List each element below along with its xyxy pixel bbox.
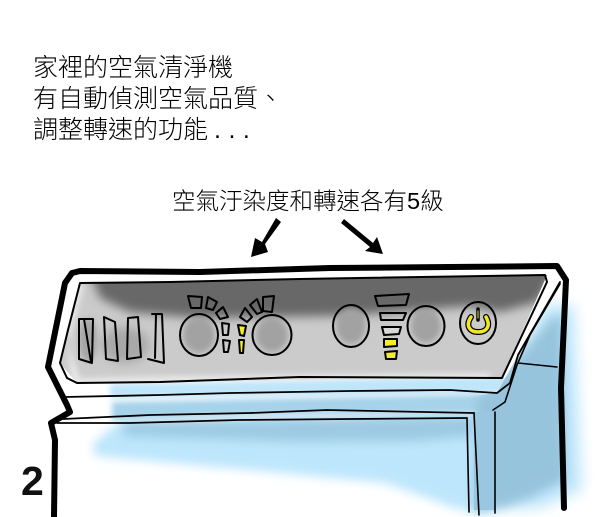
icon: power button [460, 302, 496, 344]
heading text: 有自動偵測空氣品質、 [33, 85, 283, 113]
heading text: 調整轉速的功能... [33, 116, 257, 144]
blue shading [92, 305, 582, 515]
arrow: right [341, 219, 383, 254]
outer outline [48, 266, 566, 517]
heading text [33, 54, 283, 144]
illustration: air purifier control panel [45, 218, 589, 517]
panel face shading [61, 275, 547, 382]
panel number: 2 [21, 458, 44, 504]
arrow: left [251, 218, 281, 257]
right dials and fan speed indicators [333, 294, 444, 359]
vents [79, 314, 164, 363]
caption: five levels: 空氣汙染度和轉速各有5級 [172, 188, 444, 214]
heading text: 家裡的空氣清淨機 [33, 54, 233, 82]
left dial and pollution level indicators [180, 296, 292, 356]
